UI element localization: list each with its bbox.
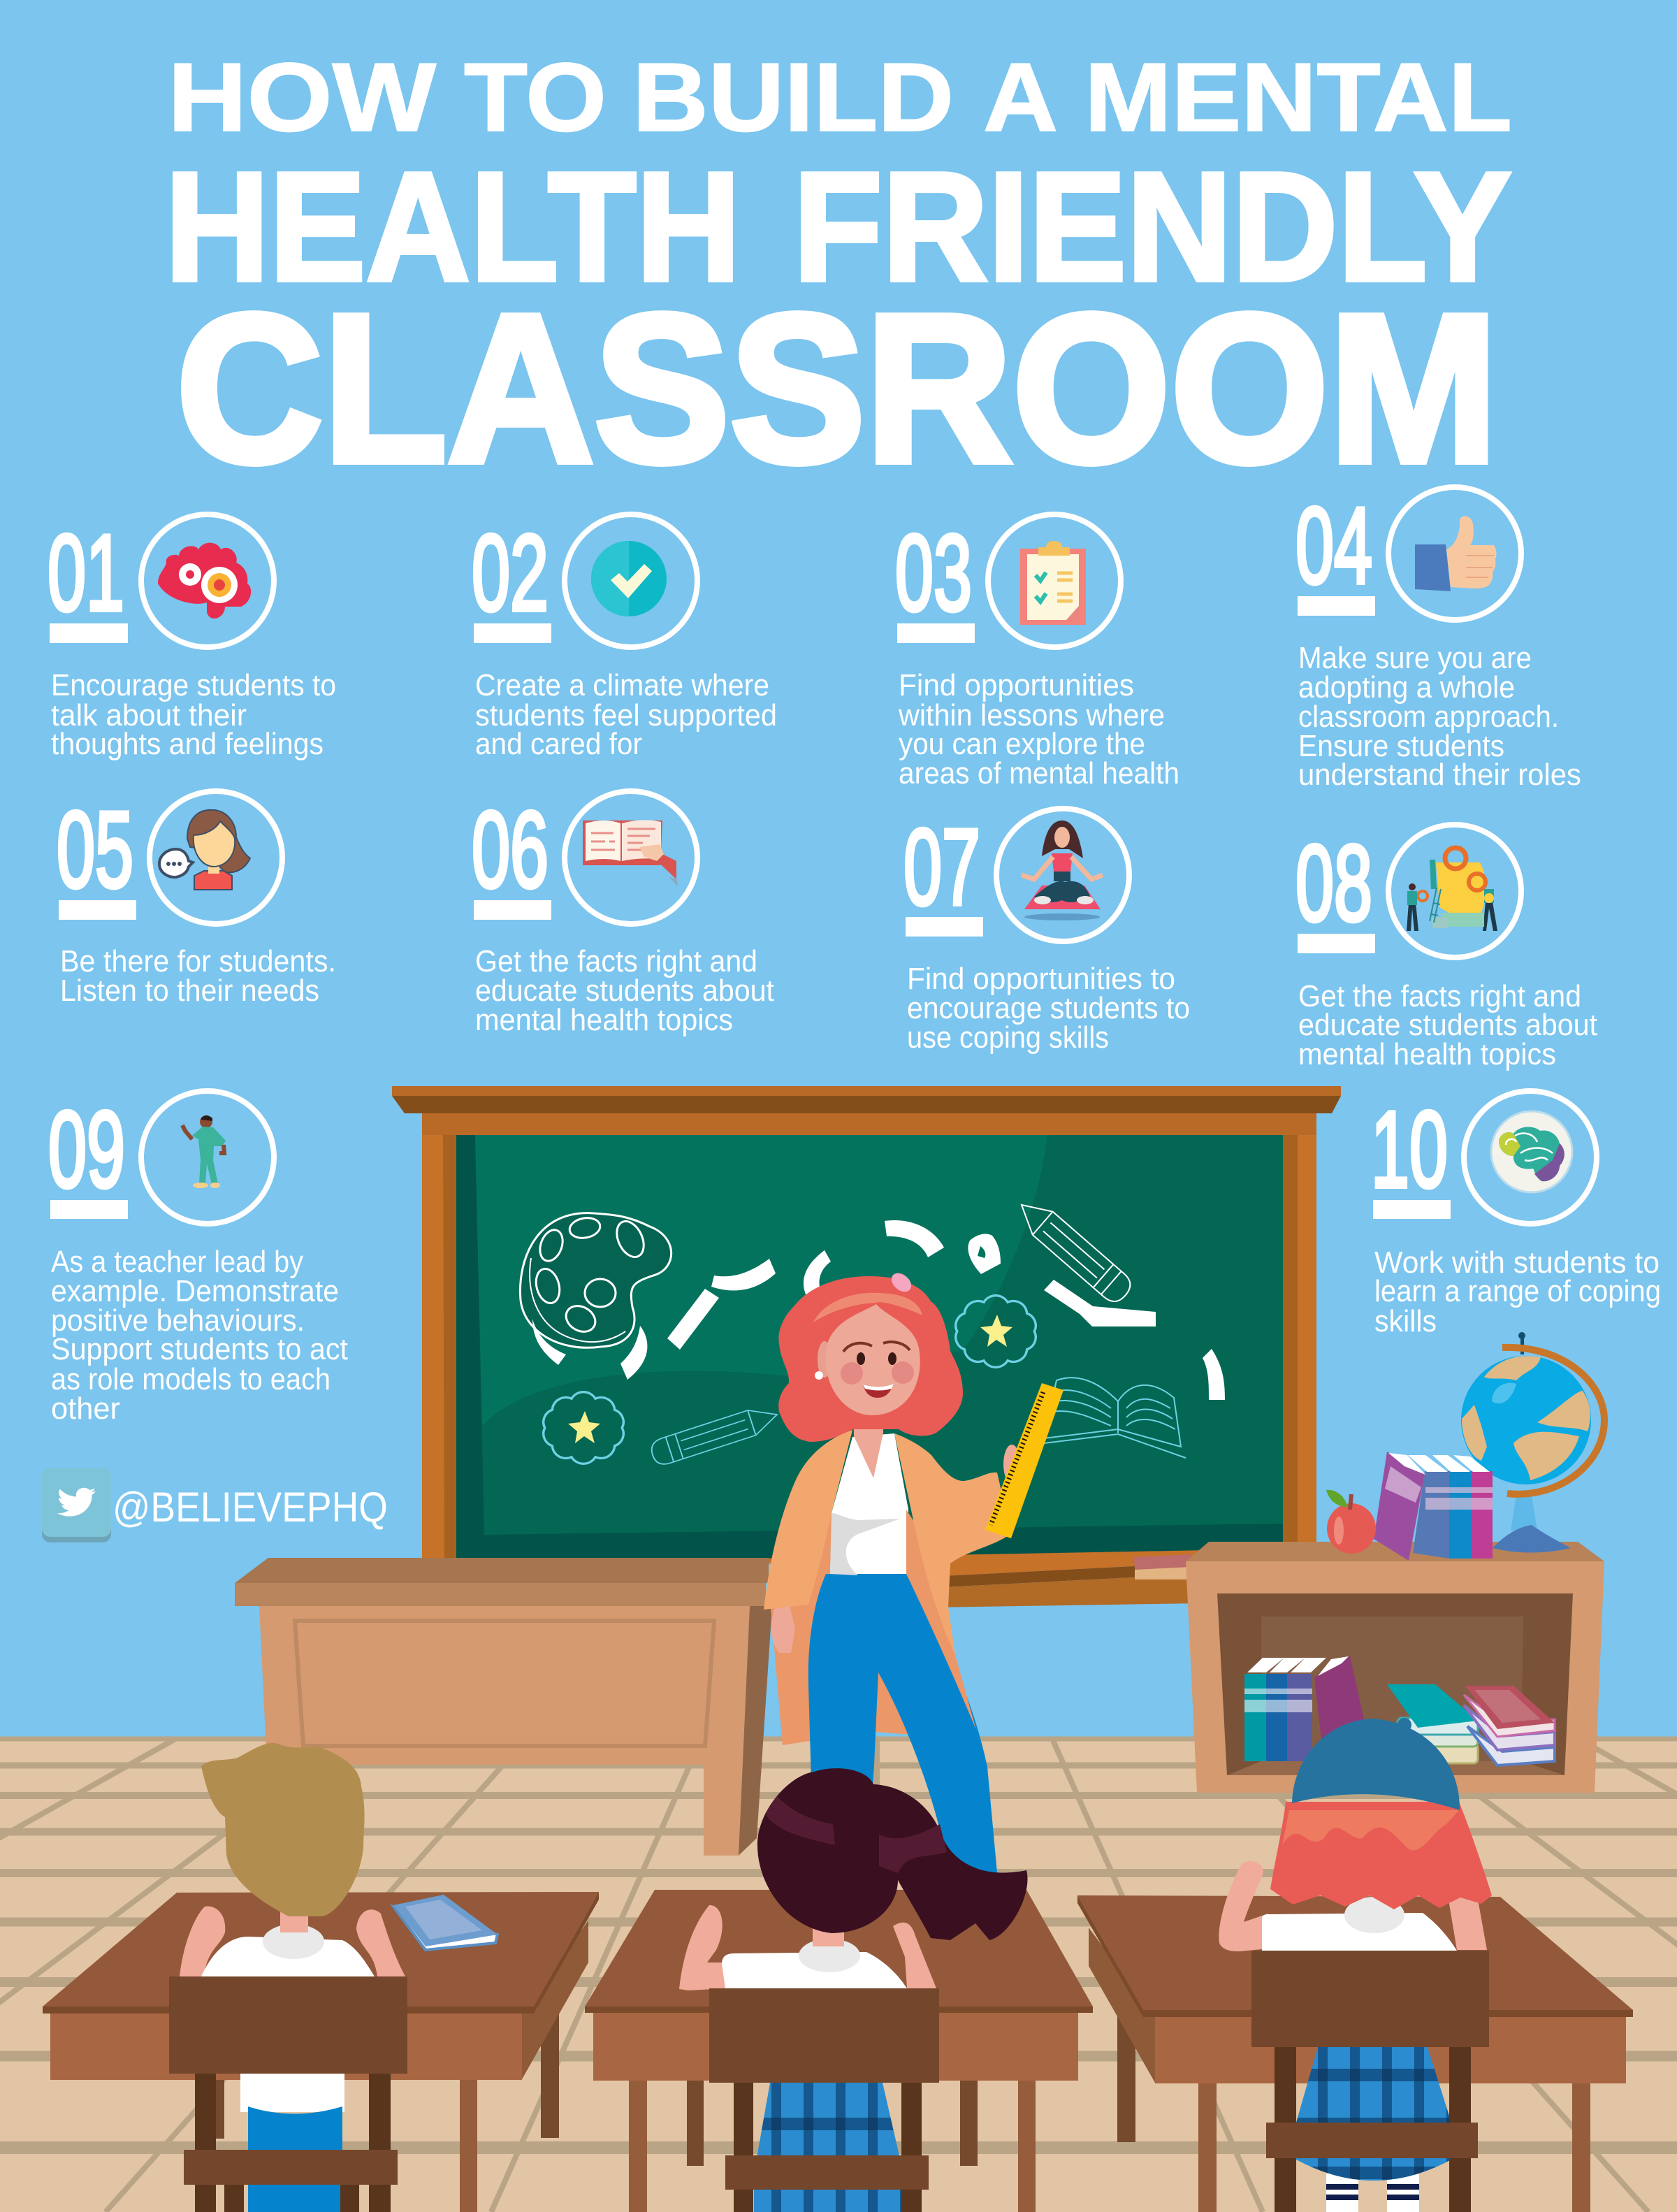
step 07: encourage students to [907, 991, 1190, 1025]
step 03: you can explore the [899, 727, 1145, 761]
step 06: educate students about [475, 974, 774, 1008]
desk 2 [585, 1890, 1093, 2212]
step 02 [472, 512, 777, 761]
step 06: Get the facts right and [475, 944, 757, 978]
icon: man in scrubs [182, 1115, 226, 1188]
step 05: Listen to their needs [60, 974, 319, 1008]
student 1 [180, 1743, 405, 2212]
desk 3 [1077, 1895, 1633, 2212]
step 04: understand their roles [1298, 758, 1581, 792]
title: HEALTH [165, 140, 741, 314]
chalk star clouds [544, 1296, 1036, 1463]
step 07: use coping skills [907, 1020, 1109, 1055]
hair [778, 1276, 963, 1442]
beanie [1292, 1719, 1460, 1810]
left jacket tail and inner lining [771, 1513, 832, 1745]
shirt [1262, 1913, 1457, 1951]
icon: meditating woman [1022, 821, 1103, 920]
title: FRIENDLY [793, 140, 1511, 314]
step 08: mental health topics [1298, 1037, 1556, 1071]
cabinet with books and globe [1186, 1332, 1604, 1793]
step 03: Find opportunities [899, 668, 1134, 702]
chalkboard [392, 1086, 1341, 1607]
twitter handle [42, 1468, 388, 1542]
hand holding ruler [1003, 1445, 1020, 1484]
face [825, 1304, 920, 1415]
icon: colourful brain [1491, 1111, 1572, 1192]
shirt shadow [830, 1513, 900, 1575]
torso and legs [240, 2074, 344, 2112]
red book stack [1464, 1686, 1555, 1765]
chalk pencils [648, 1193, 1135, 1468]
step 09: 09 [48, 1089, 125, 1210]
chair 2 [709, 1988, 939, 2212]
step 06: 06 [472, 789, 549, 910]
icon: woman with speech bubble [159, 810, 250, 890]
title: BUILD [632, 43, 954, 152]
step 01: Encourage students to [51, 668, 336, 702]
title: CLASSROOM [176, 270, 1498, 506]
legs and socks [1326, 2174, 1419, 2212]
teal book stack [1384, 1684, 1478, 1763]
chalk ledge [929, 1547, 1202, 1577]
icon: check badge [591, 541, 667, 616]
step 03 [895, 512, 1179, 790]
ruler [985, 1383, 1063, 1538]
step 09: as role models to each [51, 1362, 331, 1396]
collar [1344, 1897, 1404, 1933]
face features [841, 1342, 914, 1398]
title: MENTAL [1084, 43, 1512, 152]
step 07: Find opportunities to [907, 962, 1175, 996]
step 01 [48, 512, 336, 761]
step 08: educate students about [1298, 1008, 1597, 1042]
step 07 [903, 807, 1190, 1055]
icon: red brain with gears [158, 543, 251, 619]
board frame [422, 1113, 1316, 1566]
title: A [983, 43, 1058, 152]
step 02: 02 [472, 512, 549, 633]
step 10 [1371, 1089, 1661, 1338]
step 02: and cared for [475, 727, 642, 761]
step 10: skills [1374, 1304, 1437, 1338]
title [165, 43, 1512, 506]
icon: teamwork head with gears [1407, 848, 1497, 931]
title: TO [464, 43, 607, 152]
chair 1 [169, 1976, 407, 2212]
step 09: example. Demonstrate [51, 1274, 339, 1308]
step 04: Make sure you are [1298, 641, 1532, 675]
step 03: within lessons where [898, 698, 1165, 732]
step 04: classroom approach. [1298, 700, 1559, 734]
step 02: students feel supported [475, 698, 777, 732]
floor tiles [0, 1739, 1677, 2212]
hair [757, 1768, 1028, 1940]
step 09: As a teacher lead by [51, 1245, 303, 1279]
step 03: areas of mental health [899, 756, 1179, 790]
step 02: Create a climate where [475, 668, 769, 702]
step 07: 07 [903, 807, 980, 927]
hair [201, 1743, 365, 1916]
shirt [830, 1433, 908, 1574]
student chairs [169, 1951, 1489, 2212]
step 09: positive behaviours. [51, 1303, 305, 1338]
plaid skirt [754, 2083, 903, 2212]
book on desk [393, 1895, 498, 1950]
jacket left side [764, 1430, 852, 1610]
board surface [456, 1135, 1283, 1564]
icon: apple [1326, 1490, 1376, 1554]
desk 1 [43, 1892, 599, 2212]
arms [1219, 1861, 1487, 1951]
step 01: talk about their [51, 698, 247, 732]
step 08 [1295, 823, 1597, 1071]
books on shelf [1244, 1656, 1555, 1765]
chalk open book [1044, 1378, 1186, 1458]
step 10: Work with students to [1374, 1245, 1660, 1280]
icon: thumbs up [1415, 516, 1497, 591]
book on ledge [1134, 1554, 1191, 1580]
plaid skirt [1296, 2047, 1451, 2181]
student desks [43, 1890, 1633, 2212]
left hand [771, 1606, 795, 1653]
chalk palette [520, 1213, 671, 1347]
hair band [813, 1293, 922, 1322]
title: HOW [168, 43, 437, 152]
step 06 [472, 789, 774, 1037]
teacher's desk [235, 1558, 772, 1856]
icon: clipboard checklist [1020, 541, 1086, 625]
step 04 [1295, 485, 1581, 792]
twitter handle: @BELIEVEPHQ [112, 1484, 388, 1531]
step 08: Get the facts right and [1298, 979, 1581, 1013]
arms [180, 1906, 405, 1976]
icon: globe [1461, 1332, 1604, 1553]
background wall [0, 0, 1677, 1739]
desk panel [295, 1621, 714, 1746]
step 03: 03 [895, 512, 972, 633]
books on top [1374, 1452, 1493, 1561]
hair [1270, 1802, 1492, 1909]
ear and earring [818, 1341, 832, 1378]
teacher [764, 1269, 1063, 1880]
neck [853, 1405, 883, 1478]
step 08: 08 [1295, 823, 1372, 944]
step 04: Ensure students [1298, 729, 1504, 763]
chair 3 [1251, 1951, 1489, 2212]
jacket right side [894, 1433, 1011, 1655]
top moulding [392, 1096, 1341, 1113]
student 3 [1219, 1718, 1492, 2212]
step 04: adopting a whole [1298, 670, 1515, 704]
step 09: other [51, 1391, 120, 1426]
step 09 [48, 1089, 348, 1426]
hair highlight [1282, 1810, 1459, 1850]
step 05: Be there for students. [60, 944, 336, 978]
step 01: thoughts and feelings [51, 727, 324, 761]
collar [799, 1939, 860, 1972]
step 10: 10 [1371, 1089, 1448, 1210]
cabinet body [1186, 1542, 1604, 1561]
student 2 [679, 1768, 1028, 2212]
icon: twitter button [42, 1468, 111, 1542]
right jacket lining [906, 1510, 976, 1730]
step 06: mental health topics [475, 1003, 733, 1037]
hair flower [888, 1269, 915, 1296]
shirt [201, 1937, 375, 1976]
step 01: 01 [48, 512, 124, 633]
rear jacket between legs [873, 1642, 978, 1740]
step 09: Support students to act [51, 1332, 348, 1366]
shirt [722, 1952, 907, 1988]
step 04: 04 [1295, 485, 1372, 606]
arms [679, 1905, 936, 1990]
icon: open book with writing hand [583, 820, 678, 886]
step 05 [57, 789, 336, 1008]
collar [263, 1924, 324, 1959]
step 05: 05 [57, 789, 133, 910]
white chalk strokes [532, 1220, 1225, 1400]
legs [808, 1574, 998, 1880]
